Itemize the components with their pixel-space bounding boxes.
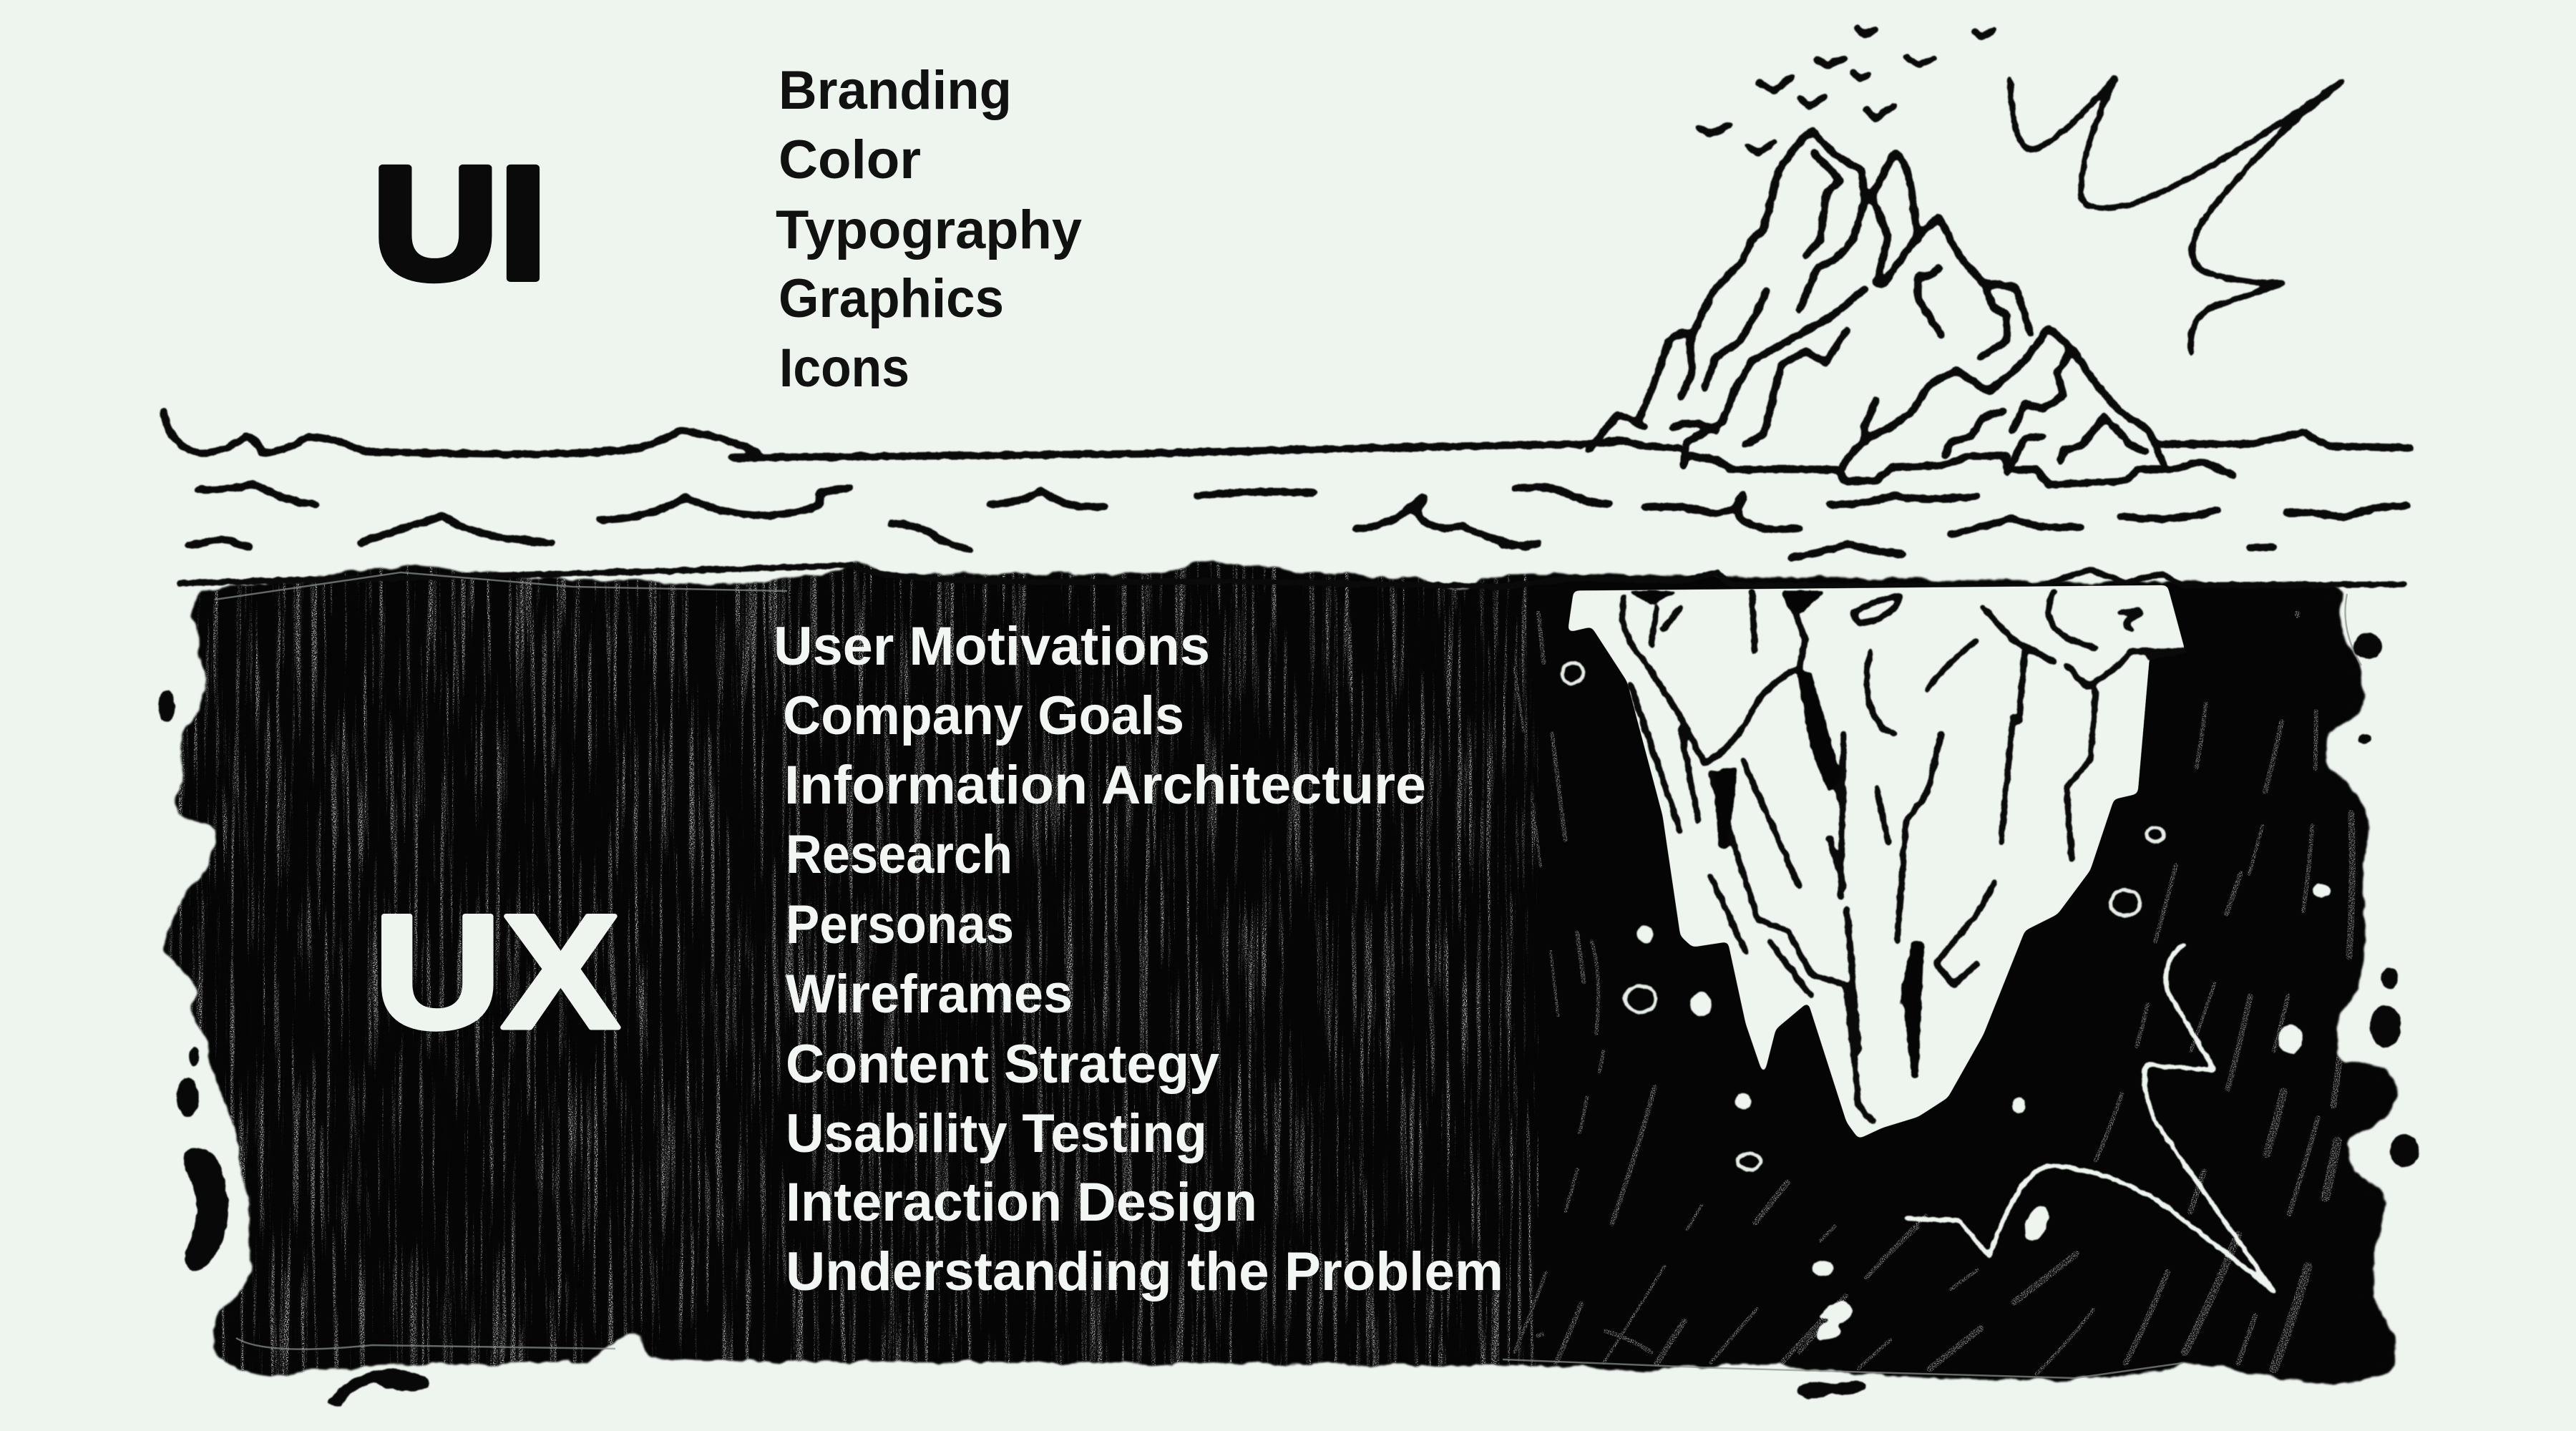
UX heading: UX [374,881,620,1062]
underwater ink mass [107,558,2404,1417]
UI skills list: Typography [776,200,1082,260]
UI skills list: Icons [779,338,909,399]
UI heading: UI [372,134,547,313]
UX skills list: Research [786,824,1013,885]
ink splatter blobs [158,633,2419,1407]
iceberg below water [1568,585,2185,1138]
bubble rings [1562,663,2164,1170]
underwater bubbles and white starburst [1562,663,2331,1341]
UX skills list: Understanding the Problem [786,1241,1503,1302]
white starburst [1906,944,2274,1292]
ink contour highlights [215,572,2361,1378]
ink mass fill [162,561,2399,1385]
starburst lines top right [2010,77,2342,353]
UX skills list: Personas [786,894,1014,955]
UX skills list: Information Architecture [784,755,1426,816]
UX skills list [774,616,1503,1302]
UX skills list: Company Goals [783,685,1184,746]
UX skills list: Interaction Design [786,1172,1257,1233]
ocean surface lines [164,411,2411,558]
UX skills list: Content Strategy [786,1034,1219,1095]
iceberg body [1568,585,2185,1138]
UX skills list: User Motivations [774,616,1210,677]
brush texture [107,558,2360,1417]
waterline [179,565,2404,587]
bubble dots [1636,884,2331,1341]
UX skills list: Usability Testing [786,1103,1207,1164]
UI skills list [776,60,1082,399]
UI skills list: Color [779,130,921,190]
UI skills list: Branding [779,60,1012,121]
flock of birds [1699,28,1994,153]
iceberg interior cracks [1622,591,2185,1122]
UI skills list: Graphics [779,268,1004,329]
UX skills list: Wireframes [786,964,1073,1025]
iceberg above water [1589,131,2164,473]
